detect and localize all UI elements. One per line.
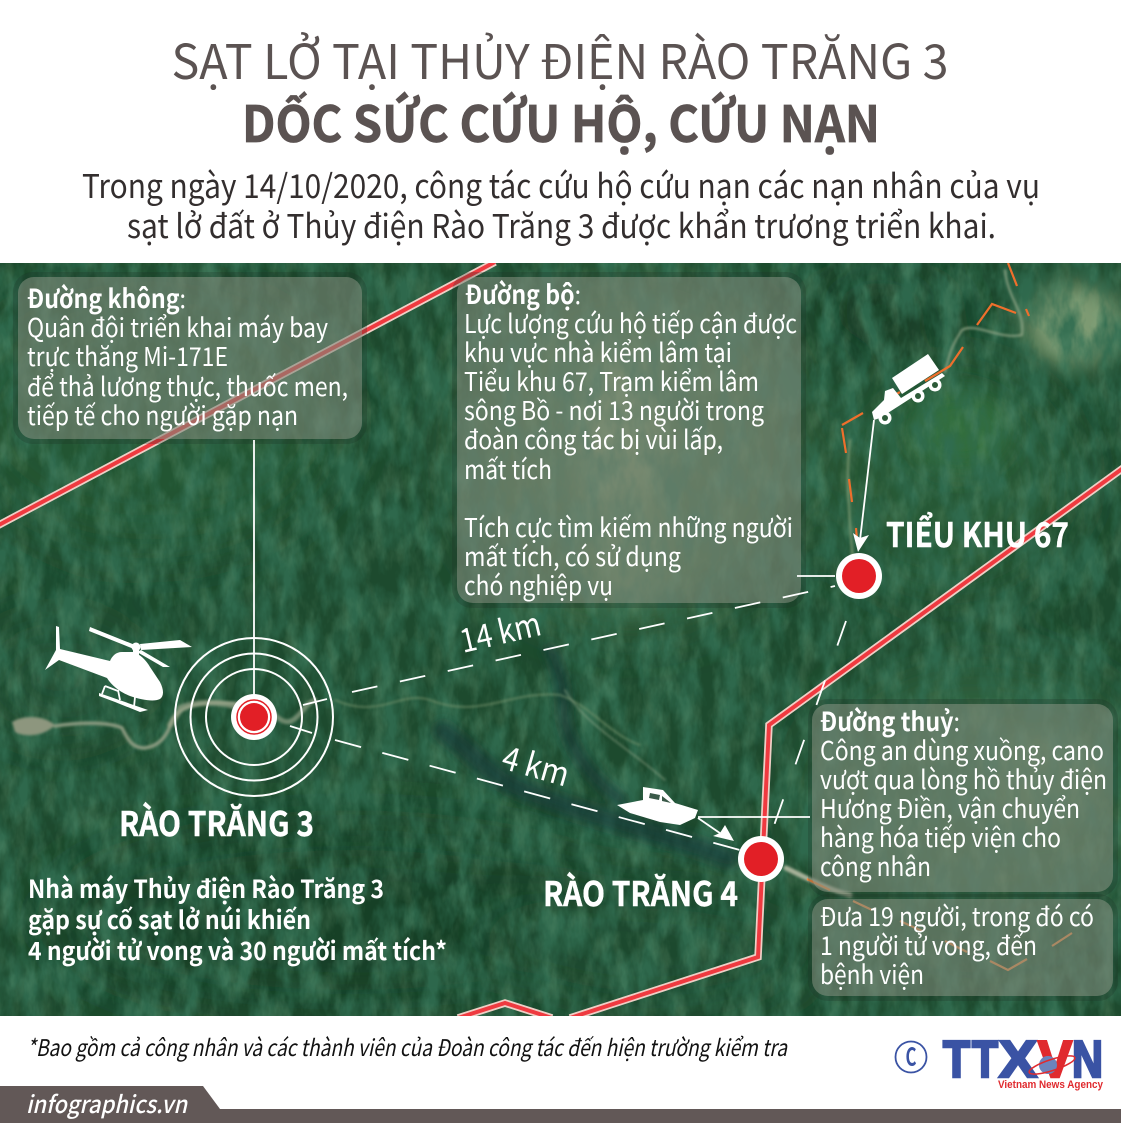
distance label 4 km: 4 km: [497, 731, 576, 796]
title line 2: DỐC SỨC CỨU HỘ, CỨU NẠN: [242, 85, 880, 157]
logo: TTXVN: [943, 1031, 1104, 1091]
evacuation text: [820, 897, 1094, 992]
logo: TTXVN: X: [999, 1031, 1037, 1089]
water rescue text: công nhân: [820, 847, 931, 884]
arrow: boat to Rào Trăng 4: [698, 818, 734, 841]
road rescue text: Tích cực tìm kiếm những người: [464, 508, 793, 545]
satellite map background: [0, 260, 1121, 1020]
road rescue text: [464, 275, 797, 603]
air rescue text: tiếp tế cho người gặp nạn: [27, 396, 298, 433]
marker: Rào Trăng 4: [738, 836, 784, 882]
marker: Tiểu khu 67: [836, 553, 882, 599]
distance label 14 km: 14 km: [454, 598, 545, 663]
road rescue text: sông Bồ - nơi 13 người trong: [464, 391, 764, 428]
title line 1: SẠT LỞ TẠI THỦY ĐIỆN RÀO TRĂNG 3: [172, 23, 948, 93]
label: Rào Trăng 3: RÀO TRĂNG 3: [119, 797, 314, 846]
intro text: Trong ngày 14/10/2020, công tác cứu hộ cứu nạn các nạn nhân của vụ: [82, 160, 1040, 208]
road rescue text: chó nghiệp vụ: [464, 566, 613, 603]
label: Tiểu khu 67: TIỂU KHU 67: [886, 508, 1069, 557]
dashed distance lines: [254, 440, 846, 850]
intro text: [82, 160, 1040, 248]
panel: road rescue: [452, 272, 806, 608]
footer tab: infographics.vn: [26, 1085, 188, 1120]
target: Rào Trăng 3: [175, 638, 333, 796]
evacuation text: Đưa 19 người, trong đó có: [820, 897, 1094, 934]
water rescue text: Hương Điền, vận chuyển: [820, 789, 1080, 826]
panel: air rescue: [13, 272, 367, 444]
road rescue text: khu vực nhà kiểm lâm tại: [464, 333, 732, 370]
river and road bright band: [12, 270, 1022, 895]
air rescue text: để thả lương thực, thuốc men,: [27, 367, 348, 404]
footer bar: [0, 1109, 1121, 1123]
intro text: sạt lở đất ở Thủy điện Rào Trăng 3 được khẩn trương triển khai.: [127, 200, 996, 248]
copyright mark: [896, 1038, 926, 1072]
water rescue text: [820, 702, 1107, 884]
air rescue text: Quân đội triển khai máy bay: [27, 308, 328, 345]
copyright mark: C: [906, 1038, 917, 1072]
incident summary: [28, 870, 447, 968]
logo: TTXVN: Vietnam News Agency: [998, 1079, 1104, 1091]
road rescue text: Lực lượng cứu hộ tiếp cận được: [464, 304, 797, 341]
incident summary: Nhà máy Thủy điện Rào Trăng 3: [28, 870, 384, 906]
evacuation text: 1 người tử vong, đến: [820, 926, 1037, 963]
panel: water rescue: [808, 699, 1118, 897]
icon: truck: [872, 354, 945, 424]
air rescue text: trực thăng Mi-171E: [27, 337, 228, 374]
logo: TTXVN: T: [972, 1031, 998, 1089]
logo: TTXVN: N: [1072, 1031, 1103, 1089]
lake: [443, 650, 728, 858]
icon: boat: [617, 787, 698, 825]
air rescue text: [27, 279, 348, 433]
logo: TTXVN: V: [1038, 1031, 1072, 1089]
road rescue text: mất tích, có sử dụng: [464, 537, 681, 574]
panel: evacuation note: [808, 894, 1118, 1001]
water rescue text: hàng hóa tiếp viện cho: [820, 818, 1061, 855]
incident summary: 4 người tử vong và 30 người mất tích*: [28, 932, 447, 968]
road rescue text: Đường bộ:: [465, 275, 581, 312]
icon: helicopter: [45, 626, 192, 712]
route lines: [0, 262, 1121, 1018]
air rescue text: Đường không:: [27, 279, 186, 316]
road rescue text: Tiểu khu 67, Trạm kiểm lâm: [464, 362, 759, 399]
road rescue text: mất tích: [464, 450, 552, 487]
incident summary: gặp sự cố sạt lở núi khiến: [28, 901, 311, 937]
label: Rào Trăng 4: RÀO TRĂNG 4: [543, 867, 738, 916]
evacuation text: bệnh viện: [820, 955, 924, 992]
road rescue text: đoàn công tác bị vùi lấp,: [464, 420, 723, 457]
arrow: truck to Tiểu khu 67: [853, 420, 874, 552]
water rescue text: Đường thuỷ:: [820, 702, 960, 739]
logo: TTXVN: T: [943, 1031, 970, 1089]
footnote: *Bao gồm cả công nhân và các thành viên của Đoàn công tác đến hiện trường kiểm tra: [27, 1029, 788, 1063]
orange dashed trail: [807, 263, 1072, 970]
